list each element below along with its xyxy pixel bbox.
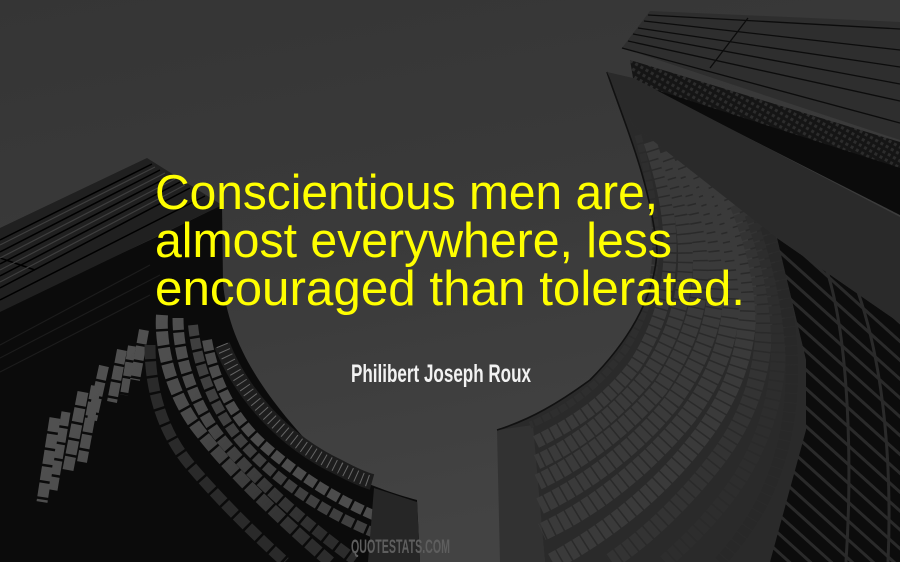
- quote line 3: encouraged than tolerated.: [155, 262, 745, 316]
- right fascia: [607, 72, 900, 323]
- quote line 2: almost everywhere, less: [155, 214, 672, 268]
- left front ridge lines: [0, 265, 160, 372]
- right block vertical ribs: [826, 268, 889, 562]
- right dark window block: [770, 238, 900, 562]
- left strip mullions: [222, 345, 372, 482]
- right curved grid base: [497, 72, 810, 562]
- left building body: [0, 205, 420, 562]
- left roof highlights: [0, 167, 185, 282]
- left dark detailed strip: [222, 345, 372, 482]
- right building: [497, 11, 900, 562]
- right band dark lower part: [650, 88, 900, 215]
- left window columns: [42, 315, 355, 562]
- left building: [0, 158, 420, 562]
- quote: [155, 166, 745, 316]
- watermark: QUOTESTATS.COM: [351, 537, 450, 558]
- left roof stripes: [0, 164, 205, 300]
- quote line 1: Conscientious men are,: [155, 166, 658, 220]
- right wall below curve: [497, 415, 545, 562]
- right roof stripes: [622, 15, 900, 123]
- right roof band: [630, 60, 900, 215]
- left curved window rows: [193, 325, 385, 532]
- author: Philibert Joseph Roux: [351, 360, 531, 388]
- right dark curved edge: [497, 72, 657, 430]
- right roof cap: [622, 11, 900, 140]
- left building roof cap: [0, 158, 222, 312]
- left building end panel: [368, 488, 420, 562]
- right curved window rows: [530, 135, 792, 562]
